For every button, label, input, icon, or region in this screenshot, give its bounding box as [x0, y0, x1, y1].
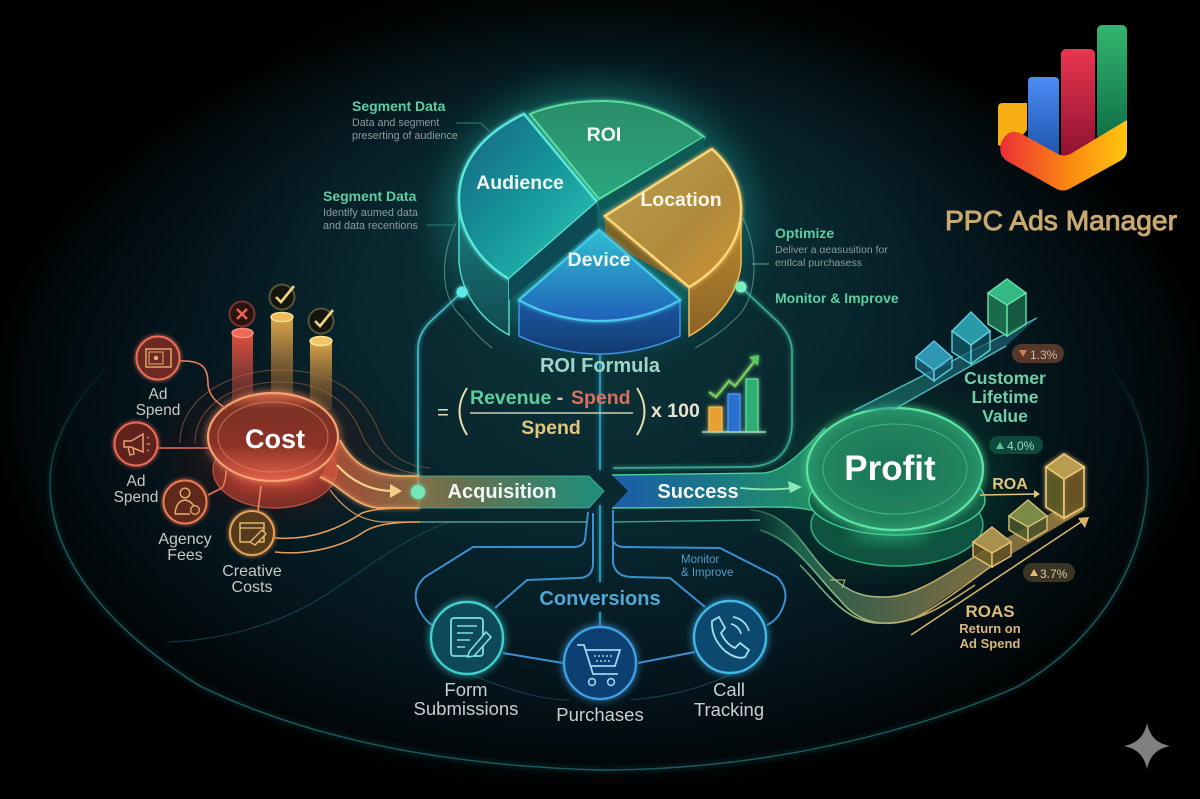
roi formula: Revenue	[470, 387, 551, 409]
slice: audience: Audience	[476, 172, 564, 194]
badge 1.3%: 1.3%	[1030, 348, 1058, 362]
icon: sparkle watermark	[1124, 723, 1170, 769]
roi formula: =	[437, 402, 449, 424]
callout: optimize: Optimize	[775, 225, 834, 241]
slice: roi	[530, 101, 704, 199]
icon: ad spend card: Ad	[149, 386, 167, 403]
callout: segment data top: preserting of audience	[352, 130, 458, 142]
roas growth arrow	[911, 520, 1084, 635]
status marks	[230, 284, 334, 334]
cost bar columns	[232, 312, 332, 410]
roi formula: Spend	[521, 417, 581, 439]
icon: agency fees: Agency	[158, 531, 212, 548]
callout: segment data top: Data and segment	[352, 117, 439, 129]
panel: cost node	[145, 284, 430, 540]
callout: optimize: Deliver a αeasusition for	[775, 244, 888, 256]
slice: audience	[459, 114, 597, 279]
profit disc base	[811, 484, 983, 566]
roi formula	[437, 355, 766, 439]
label customer lifetime value: Value	[982, 406, 1028, 426]
roi formula: Spend	[571, 387, 631, 409]
slice: audience side	[459, 199, 509, 335]
green cube tall	[988, 279, 1026, 336]
success arrow	[612, 428, 860, 526]
slice: roi: ROI	[587, 124, 621, 146]
call label: Tracking	[694, 699, 764, 720]
label roas: Return on	[959, 621, 1021, 636]
blue cube small	[916, 341, 952, 381]
slice: device side	[519, 300, 680, 354]
icon: creative costs: Costs	[232, 579, 272, 596]
gold cube medium	[1009, 500, 1047, 541]
monitor and improve note	[681, 554, 733, 579]
purchases label: Purchases	[556, 704, 644, 725]
roas bar cubes	[911, 454, 1089, 635]
icon: ad spend card	[136, 336, 226, 419]
panel: segmentation pie	[443, 85, 754, 354]
monitor and improve note: Monitor	[681, 554, 720, 566]
acquisition arrow	[411, 476, 604, 522]
rising band	[853, 318, 1037, 411]
halo ring	[445, 218, 754, 348]
badge 3.7%: 3.7%	[1040, 567, 1068, 581]
call label: Call	[713, 679, 745, 700]
badge 4.0%	[989, 436, 1043, 454]
mini growth chart	[702, 355, 766, 432]
rings	[180, 370, 430, 474]
callout: segment data top	[352, 98, 491, 142]
slice: location: Location	[640, 189, 722, 211]
slice: device: Device	[568, 249, 631, 271]
label roas: Ad Spend	[960, 636, 1020, 651]
callout: segment data middle	[323, 188, 456, 232]
conversions heading: Conversions	[539, 588, 661, 610]
icon: agency fees: Fees	[167, 547, 203, 564]
cost label: Cost	[245, 424, 305, 454]
call label	[694, 679, 764, 720]
callout: optimize: entlcal purchasess	[775, 257, 862, 269]
conversions network	[416, 510, 785, 700]
customer lifetime value chart	[853, 279, 1064, 426]
form label: Submissions	[414, 698, 518, 719]
slice: device	[519, 230, 680, 321]
icon: call tracking	[694, 601, 766, 720]
disc	[208, 393, 338, 481]
logo mark	[998, 25, 1127, 190]
callout: segment data middle: and data recentions	[323, 220, 418, 232]
icon: agency fees	[158, 470, 226, 564]
form label: Form	[444, 679, 488, 700]
formula title: ROI Formula	[540, 355, 661, 377]
profit label: Profit	[844, 449, 936, 488]
slice: location	[605, 149, 741, 287]
disc base	[213, 432, 337, 508]
pie connector dot right	[736, 282, 746, 292]
icon: ad spend megaphone: Ad	[127, 473, 145, 490]
label customer lifetime value	[964, 368, 1046, 426]
callout: segment data middle: Identify aumed data	[323, 207, 418, 219]
icon: creative costs: Creative	[222, 563, 282, 580]
gold cube tall	[1046, 454, 1084, 518]
badge 4.0%: 4.0%	[1007, 439, 1035, 453]
callout: segment data middle: Segment Data	[323, 188, 417, 204]
label roas: ROAS	[965, 602, 1015, 621]
large orbit ellipse	[50, 357, 1148, 770]
success label: Success	[657, 481, 739, 503]
logo wordmark: PPC Ads Manager	[945, 205, 1177, 236]
icon: form submissions	[414, 602, 518, 719]
roas band	[750, 500, 1085, 623]
blue cube medium	[952, 312, 990, 364]
icon: ad spend megaphone: Spend	[114, 489, 158, 506]
cost outflow band	[275, 440, 420, 553]
icon: creative costs	[222, 486, 282, 596]
roa label and arrow: ROA	[992, 476, 1028, 493]
pie connector dot left	[456, 286, 468, 298]
junction dot	[411, 485, 425, 499]
profit disc top	[807, 408, 983, 530]
icon: purchases	[556, 627, 644, 725]
success flow arrow	[740, 481, 802, 493]
badge 3.7%	[1023, 563, 1075, 582]
callout: optimize	[752, 225, 888, 269]
gold cube small	[973, 527, 1011, 567]
icon: ad spend megaphone	[114, 422, 209, 506]
roa label and arrow	[980, 476, 1040, 498]
label roas	[959, 602, 1021, 651]
icon: ad spend card: Spend	[136, 402, 180, 419]
roi formula: x 100	[651, 400, 700, 422]
badge 1.3%	[1012, 344, 1064, 363]
callout: segment data top: Segment Data	[352, 98, 446, 114]
callout: monitor and improve: Monitor & Improve	[775, 290, 899, 306]
panel: profit node	[745, 375, 1045, 595]
slice: location side	[689, 210, 741, 336]
monitor and improve note: & Improve	[681, 567, 733, 579]
pie glow	[443, 85, 753, 345]
label customer lifetime value: Customer	[964, 368, 1046, 388]
acquisition label: Acquisition	[448, 481, 556, 503]
connector frame from pie to acquisition and success	[418, 287, 792, 627]
roi formula: -	[557, 387, 563, 409]
form label	[414, 679, 518, 719]
label customer lifetime value: Lifetime	[971, 387, 1039, 407]
